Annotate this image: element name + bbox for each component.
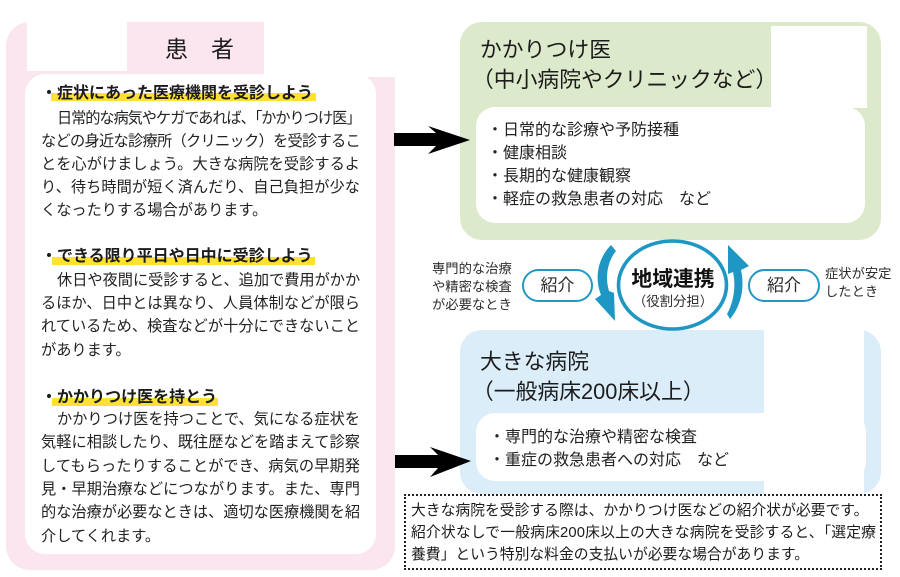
white notch: [771, 26, 867, 108]
body text: 的な治療が必要なときは、適切な医療機関を紹: [41, 504, 360, 521]
white notch left of tab: [27, 20, 127, 71]
body text: [41, 410, 360, 545]
note box: 紹介状なしで一般病床200床以上の大きな病院を受診すると、「選定療: [411, 525, 876, 541]
body text: があります。: [41, 342, 131, 359]
heading line 2: （中小病院やクリニックなど）: [472, 67, 777, 92]
services list: [476, 107, 865, 223]
body text: くなったりする場合があります。: [41, 202, 267, 219]
highlight: [52, 398, 218, 406]
body text: れているため、検査などが十分にできないこと: [41, 318, 360, 335]
panel: family doctor: [460, 22, 881, 240]
down arrow: [595, 245, 616, 321]
body text: 気軽に相談したり、既往歴などを踏まえて診察: [41, 434, 360, 451]
body text: 見・早期治療などにつながります。また、専門: [41, 481, 360, 498]
arrow: patient to large hospital: [395, 447, 471, 477]
services list: ・健康相談: [487, 145, 567, 162]
body text: [41, 272, 360, 359]
heading line 1: かかりつけ医: [480, 37, 611, 62]
pill: referral right: 紹介: [767, 276, 801, 295]
subheading: ・症状にあった医療機関を受診しよう: [41, 85, 313, 102]
body text: 介してくれます。: [41, 528, 160, 545]
services list: ・重症の救急患者への対応 など: [489, 452, 729, 469]
label: right: したとき: [825, 284, 878, 299]
heading line 2: （一般病床200床以上）: [472, 379, 705, 404]
note box: 大きな病院を受診する際は、かかりつけ医などの紹介状が必要です。: [411, 503, 868, 519]
heading: patient: 患 者: [165, 36, 234, 62]
services list: ・長期的な健康観察: [487, 168, 631, 185]
highlight: [51, 93, 316, 101]
up arrow: [727, 245, 749, 319]
label: left: が必要なとき: [432, 297, 512, 312]
label: left: や精密な検査: [432, 279, 512, 294]
centre subtitle: （役割分担）: [633, 294, 713, 309]
white notch right of tab: [264, 20, 400, 77]
panel: patient: [6, 22, 395, 570]
services list: ・軽症の救急患者の対応 など: [487, 191, 711, 208]
pill: referral right: [748, 269, 820, 302]
body text: るほか、日中とは異なり、人員体制などが限ら: [41, 295, 360, 312]
label: right: 症状が安定: [825, 266, 891, 281]
note box: [404, 494, 882, 570]
services list background: [476, 413, 866, 481]
body text: とを心がけましょう。大きな病院を受診するよ: [41, 156, 360, 173]
label: left: 専門的な治療: [432, 261, 512, 276]
body text: 休日や夜間に受診すると、追加で費用がかか: [57, 272, 360, 289]
pill: referral left: [522, 269, 593, 302]
highlight: [52, 257, 315, 265]
white text panel: [25, 74, 376, 554]
arrow: patient to family doctor: [394, 126, 470, 154]
pill: referral left: 紹介: [540, 276, 574, 295]
ellipse: [618, 241, 726, 329]
services list: ・日常的な診療や予防接種: [487, 122, 679, 139]
cycle arrows and ellipse: [595, 239, 749, 331]
services list: [489, 428, 729, 469]
heading line 1: 大きな病院: [480, 349, 589, 374]
centre title: 地域連携: [631, 268, 715, 291]
body text: かかりつけ医を持つことで、気になる症状を: [57, 411, 360, 428]
white notch: [764, 330, 864, 494]
body text: 日常的な病気やケガであれば、「かかりつけ医」: [57, 110, 360, 127]
note box: 養費」という特別な料金の支払いが必要な場合があります。: [411, 547, 809, 563]
panel: large hospital: [460, 330, 881, 494]
subheading: ・できる限り平日や日中に受診しよう: [41, 248, 313, 265]
body text: り、待ち時間が短く済んだり、自己負担が少な: [41, 179, 360, 196]
body text: などの身近な診療所（クリニック）を受診するこ: [41, 133, 360, 150]
body text: [41, 110, 360, 219]
section: see the right institution: [41, 84, 360, 219]
label: left: [432, 261, 512, 312]
section: have a family doctor: [41, 388, 360, 545]
body text: してもらったりすることができ、病気の早期発: [41, 458, 360, 475]
label: right: [825, 266, 891, 299]
section: weekdays and daytime: [41, 247, 360, 359]
panel background: [6, 22, 395, 570]
services list: ・専門的な治療や精密な検査: [489, 429, 697, 446]
subheading: ・かかりつけ医を持とう: [41, 389, 217, 406]
diagram: regional cooperation: [432, 239, 891, 331]
